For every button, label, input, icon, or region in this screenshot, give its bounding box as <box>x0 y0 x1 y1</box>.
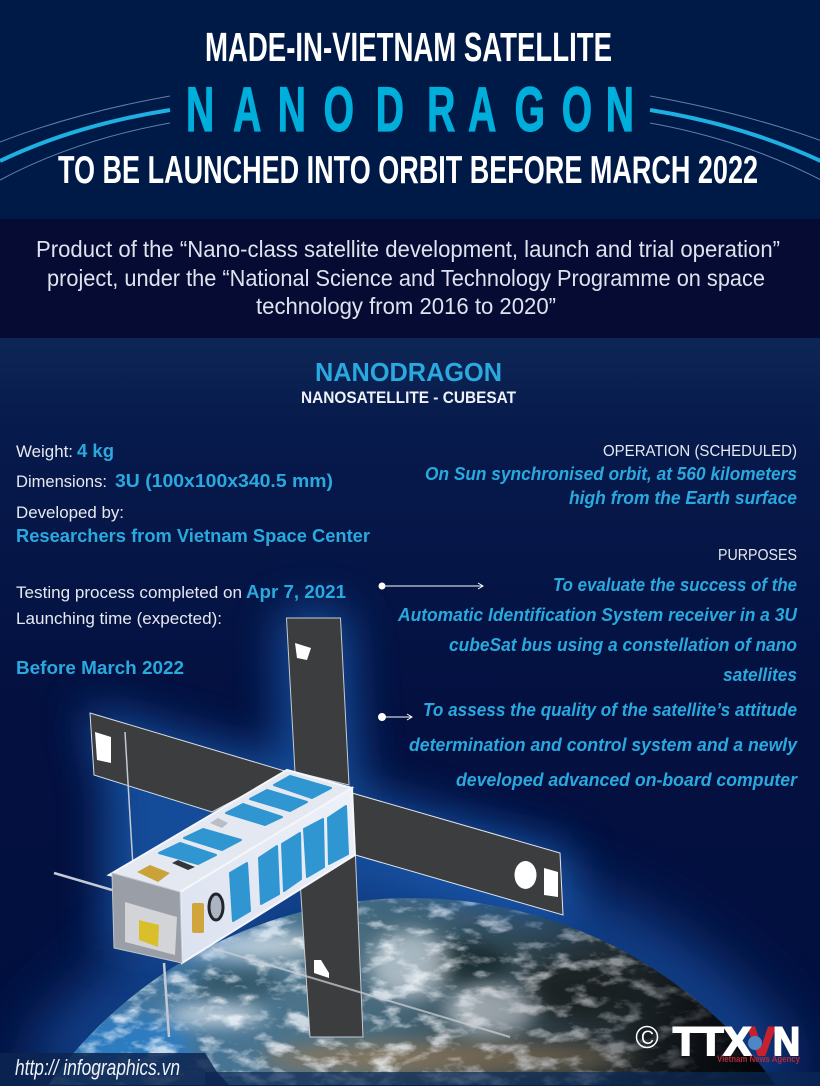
copyright symbol <box>636 1026 658 1049</box>
operation: OPERATION (SCHEDULED) <box>603 443 797 460</box>
operation: On Sun synchronised orbit, at 560 kilometers <box>425 464 797 484</box>
antennas <box>54 732 169 1037</box>
operation: high from the Earth surface <box>569 488 797 508</box>
specifications <box>16 441 370 678</box>
specifications: Researchers from Vietnam Space Center <box>16 526 370 546</box>
header arcs <box>0 96 825 182</box>
copyright symbol: C <box>641 1028 654 1049</box>
solar panel: top <box>286 618 349 785</box>
bottom strip <box>205 1072 825 1086</box>
long antenna <box>212 948 510 1037</box>
logo <box>673 1020 800 1064</box>
solar panel: bottom <box>300 845 363 1037</box>
body: side face <box>180 788 355 963</box>
title: NANODRAGON <box>186 76 634 145</box>
header background <box>0 0 825 219</box>
purposes: cubeSat bus using a constellation of nano <box>449 635 797 655</box>
band background <box>0 219 825 338</box>
purposes: satellites <box>723 665 797 685</box>
satellite glow <box>82 610 572 950</box>
url tab: http:// infographics.vn <box>15 1055 180 1080</box>
operation <box>425 443 797 508</box>
project description: Product of the “Nano-class satellite development, launch and trial operation” <box>36 236 780 262</box>
specifications: Developed by: <box>16 503 124 522</box>
title: MADE-IN-VIETNAM SATELLITE <box>205 24 612 70</box>
satellite <box>54 618 563 1037</box>
arrow: purpose two <box>378 714 412 720</box>
purposes <box>397 547 798 790</box>
logo: N <box>773 1020 800 1064</box>
purposes: To assess the quality of the satellite’s attitude <box>423 700 797 720</box>
satellite heading: NANODRAGON <box>315 357 502 387</box>
title <box>58 24 758 192</box>
logo: TTX <box>673 1020 751 1064</box>
earth land and dark patches <box>70 941 640 1075</box>
purposes: determination and control system and a newly <box>409 735 798 755</box>
earth <box>40 885 785 1085</box>
solar panel: left <box>90 713 288 812</box>
earth cloud masses <box>165 931 535 1036</box>
specifications: Launching time (expected): <box>16 609 222 628</box>
earth atmosphere glow <box>48 898 776 1085</box>
purposes: developed advanced on-board computer <box>456 770 798 790</box>
purposes: PURPOSES <box>718 547 797 564</box>
specifications: Apr 7, 2021 <box>246 582 346 602</box>
logo: Vietnam News Agency <box>717 1054 800 1064</box>
purposes: Automatic Identification System receiver in a 3U <box>397 605 798 625</box>
solar panel: right <box>345 791 563 915</box>
purposes: To evaluate the success of the <box>553 575 797 595</box>
specifications: Weight: <box>16 442 73 461</box>
project description: technology from 2016 to 2020” <box>256 293 556 319</box>
lower background <box>0 338 825 1087</box>
arrow: purpose one <box>379 583 483 589</box>
specifications: Before March 2022 <box>16 658 184 678</box>
url tab <box>0 1053 230 1086</box>
satellite heading: NANOSATELLITE - CUBESAT <box>301 388 517 407</box>
specifications: Testing process completed on <box>16 583 242 602</box>
specifications: 4 kg <box>77 441 114 461</box>
body: front face <box>112 873 182 963</box>
specifications: 3U (100x100x340.5 mm) <box>115 471 333 491</box>
logo: V <box>748 1020 775 1064</box>
project description: project, under the “National Science and Technology Programme on space <box>47 265 765 291</box>
specifications: Dimensions: <box>16 472 107 491</box>
body: top face <box>109 770 352 892</box>
satellite heading <box>301 357 517 407</box>
project description <box>36 236 780 319</box>
